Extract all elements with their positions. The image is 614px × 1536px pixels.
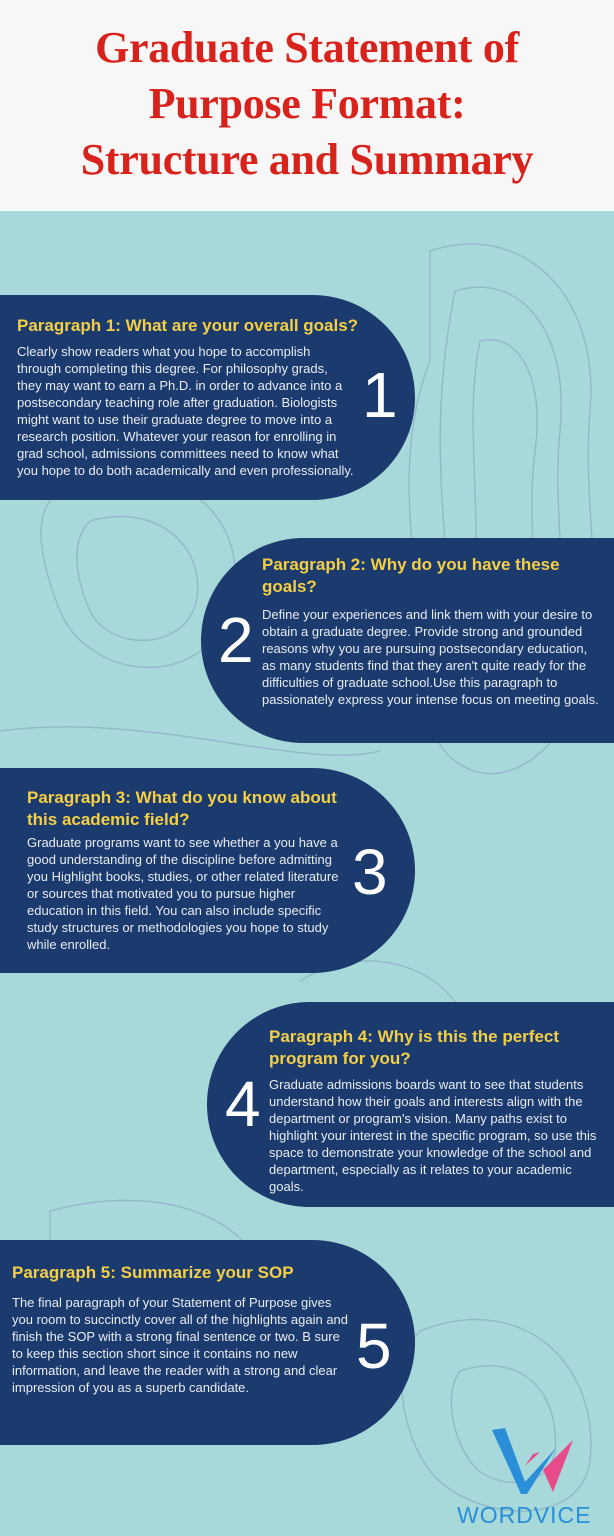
text 1 [17,344,354,478]
text 1: grad school, admissions committees need to know what [17,446,339,461]
text 1: you hope to do both academically and even professionally. [17,463,354,478]
title: Purpose Format: [149,79,465,128]
heading 2: goals? [262,577,317,596]
text 5: finish the SOP with a strong final sentence or two. B sure [12,1329,340,1344]
heading 2: Paragraph 2: Why do you have these [262,555,560,574]
text 5: information, and leave the reader with a strong and clear [12,1363,337,1378]
text 2: obtain a graduate degree. Provide strong and grounded [262,624,582,639]
text 3: you Highlight books, studies, or other related literature [27,869,338,884]
text 1: through completing this degree. For philosophy grads, [17,361,328,376]
text 5: you room to succinctly cover all of the highlights again and [12,1312,348,1327]
heading 3: this academic field? [27,810,190,829]
header background [0,0,614,211]
text 1: Clearly show readers what you hope to accomplish [17,344,310,359]
text 3: or sources that motivated you to pursue higher [27,886,295,901]
text 4: understand how their goals and interests align with the [269,1094,583,1109]
text 1: might want to use their graduate degree to move into a [17,412,332,427]
text 2: difficulties of graduate school.Use this paragraph to [262,675,557,690]
heading 3 [27,788,337,829]
heading 1: Paragraph 1: What are your overall goals? [17,316,358,335]
text 4: goals. [269,1179,304,1194]
number 5: 5 [356,1310,392,1382]
heading 2 [262,555,560,596]
panel: paragraph 5 [0,1240,415,1445]
panel: paragraph 1 [0,295,415,500]
panel: paragraph 2 [201,538,614,743]
text 3: while enrolled. [27,937,110,952]
panel: paragraph 4 [207,1002,614,1207]
logo: wordvice: WORDVICE [457,1502,592,1528]
text 4 [269,1077,596,1194]
text 4: department or program's vision. Many paths exist to [269,1111,567,1126]
text 5: The final paragraph of your Statement of Purpose gives [12,1295,331,1310]
text 4: Graduate admissions boards want to see that students [269,1077,583,1092]
number 1: 1 [362,359,398,431]
panel: paragraph 3 [0,768,415,973]
text 2 [262,607,599,707]
logo: wordvice [457,1428,592,1528]
text 1: postsecondary teaching role after graduation. Biologists [17,395,337,410]
text 3: education in this field. You can also include specific [27,903,321,918]
text 2: Define your experiences and link them with your desire to [262,607,592,622]
number 3: 3 [352,836,388,908]
text 2: as many students find that they aren't quite ready for the [262,658,586,673]
heading 4: program for you? [269,1049,411,1068]
text 1: research position. Whatever your reason for enrolling in [17,429,336,444]
text 2: reasons why you are pursuing postsecondary education, [262,641,587,656]
text 5: impression of you as a superb candidate. [12,1380,249,1395]
text 1: they may want to earn a Ph.D. in order to advance into a [17,378,342,393]
title: Structure and Summary [81,135,533,184]
text 4: department, especially as it relates to your academic [269,1162,572,1177]
text 3: Graduate programs want to see whether a you have a [27,835,338,850]
number 2: 2 [218,604,254,676]
heading 3: Paragraph 3: What do you know about [27,788,337,807]
text 2: passionately express your intense focus on meeting goals. [262,692,599,707]
number 4: 4 [225,1068,261,1140]
heading 4 [269,1027,559,1068]
text 4: space to demonstrate your knowledge of the school and [269,1145,591,1160]
text 5 [12,1295,348,1395]
heading 4: Paragraph 4: Why is this the perfect [269,1027,559,1046]
text 3 [27,835,338,952]
text 3: good understanding of the discipline before admitting [27,852,332,867]
text 4: highlight your interest in the specific program, so use this [269,1128,596,1143]
text 3: study structures or methodologies you hope to study [27,920,328,935]
text 5: to keep this section short since it contains no new [12,1346,297,1361]
title: Graduate Statement of [95,23,519,72]
title [81,23,534,184]
heading 5: Paragraph 5: Summarize your SOP [12,1263,294,1282]
